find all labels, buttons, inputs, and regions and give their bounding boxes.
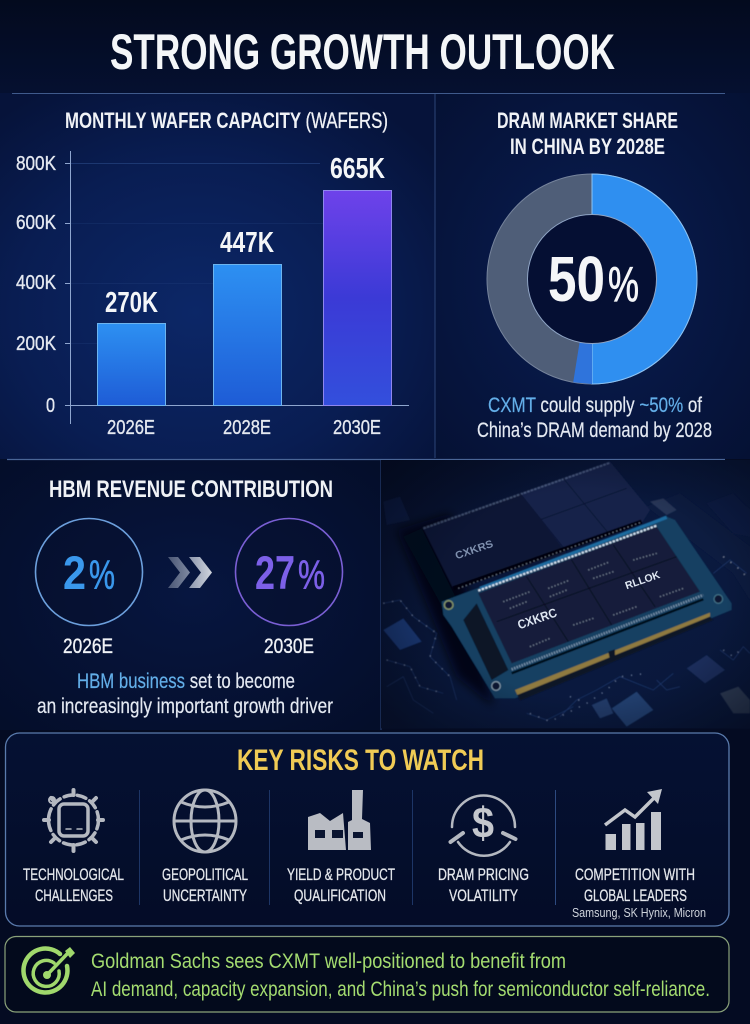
risk: geopolitical uncertainty: UNCERTAINTY xyxy=(163,886,247,905)
y axis labels xyxy=(16,153,57,417)
risk: competition with global leaders: COMPETITION WITH xyxy=(575,865,695,884)
icon: globe xyxy=(174,790,236,852)
heading: DRAM market share: DRAM MARKET SHARE xyxy=(497,108,678,133)
risk: geopolitical uncertainty xyxy=(162,790,248,905)
caption: CXMT supply: CXMT could supply ~50% of xyxy=(488,394,702,417)
chip labels xyxy=(454,538,662,632)
risk: geopolitical uncertainty: GEOPOLITICAL xyxy=(162,865,248,884)
panel: monthly wafer capacity xyxy=(16,108,409,439)
circle: 27% in 2030E: % xyxy=(298,552,325,598)
bar: 2028E 447K xyxy=(214,227,282,439)
risk: yield and product qualification xyxy=(287,790,395,905)
bar: 2026E 270K xyxy=(98,287,166,439)
bar: 2030E 665K: 665K xyxy=(330,153,385,185)
circle: 2% in 2026E: 2026E xyxy=(63,635,113,658)
heading: wafer capacity: MONTHLY WAFER CAPACITY (WAFERS) xyxy=(65,108,388,133)
chip labels: CXKRS xyxy=(454,538,495,562)
y axis labels: 800K xyxy=(16,153,57,175)
circle: 27% in 2030E: 27 xyxy=(255,546,295,599)
bar: 2028E 447K: 447K xyxy=(220,227,274,259)
heading: HBM revenue: HBM REVENUE CONTRIBUTION xyxy=(49,476,333,503)
circle: 2% in 2026E xyxy=(36,518,142,658)
caption: HBM growth driver xyxy=(37,670,333,718)
circle: 27% in 2030E: 2030E xyxy=(264,635,314,658)
icon: dollar with cycle arrows: $ xyxy=(472,799,494,848)
risk: DRAM pricing volatility xyxy=(438,796,529,905)
circle: 2% in 2026E: 2 xyxy=(63,546,86,599)
icon: rising bar chart xyxy=(605,789,662,850)
bar: 2026E 270K: 270K xyxy=(105,287,158,319)
risk: DRAM pricing volatility: DRAM PRICING xyxy=(438,865,529,884)
risk: technological challenges xyxy=(23,790,124,905)
y axis labels: 200K xyxy=(16,333,57,355)
heading: key risks: KEY RISKS TO WATCH xyxy=(237,744,484,777)
risk: DRAM pricing volatility: VOLATILITY xyxy=(449,886,518,905)
risk: technological challenges: CHALLENGES xyxy=(35,886,113,905)
icon: chip in gear xyxy=(44,790,103,851)
circle: 27% in 2030E xyxy=(236,518,342,658)
y axis labels: 0 xyxy=(46,395,55,417)
bar chart xyxy=(16,151,409,439)
panel: key risks to watch xyxy=(6,733,729,926)
bar: 2030E 665K xyxy=(324,153,392,439)
callout: Goldman Sachs view xyxy=(5,936,729,1012)
bar: 2030E 665K: 2030E xyxy=(333,417,381,439)
caption: HBM growth driver: an increasingly important growth driver xyxy=(37,695,333,718)
heading: DRAM market share xyxy=(497,108,678,159)
chip labels: CXKRC xyxy=(516,606,559,632)
donut chart: 50%: % xyxy=(608,258,639,312)
chip labels: RLLOK xyxy=(624,569,662,592)
risk: yield and product qualification: YIELD & PRODUCT xyxy=(287,865,395,884)
risk: competition with global leaders: Samsung, SK Hynix, Micron xyxy=(572,906,706,920)
caption: CXMT supply xyxy=(477,394,712,442)
caption: HBM growth driver: HBM business set to become xyxy=(77,670,295,693)
arrow: double chevron xyxy=(168,557,212,588)
icon: factory xyxy=(308,790,371,850)
panel: DRAM market share xyxy=(477,108,712,442)
risk: yield and product qualification: QUALIFICATION xyxy=(294,886,386,905)
circle: 2% in 2026E: % xyxy=(89,552,115,598)
panel: HBM revenue contribution xyxy=(36,476,342,718)
y axis labels: 600K xyxy=(16,212,57,234)
donut chart: 50% xyxy=(487,174,697,384)
risk: competition with global leaders xyxy=(572,789,706,920)
risk: competition with global leaders: GLOBAL LEADERS xyxy=(584,886,687,905)
heading: DRAM market share: IN CHINA BY 2028E xyxy=(510,134,665,159)
donut chart: 50%: 50 xyxy=(548,243,605,315)
image panel: DRAM memory modules on circuit board xyxy=(381,460,750,728)
y axis labels: 400K xyxy=(16,272,57,294)
icon: target with arrow xyxy=(23,947,75,993)
risk: technological challenges: TECHNOLOGICAL xyxy=(23,865,124,884)
callout text xyxy=(91,950,710,1001)
callout text: Goldman Sachs sees CXMT well-positioned to benefit from xyxy=(91,950,566,973)
bar: 2028E 447K: 2028E xyxy=(223,417,271,439)
bar: 2026E 270K: 2026E xyxy=(107,417,155,439)
